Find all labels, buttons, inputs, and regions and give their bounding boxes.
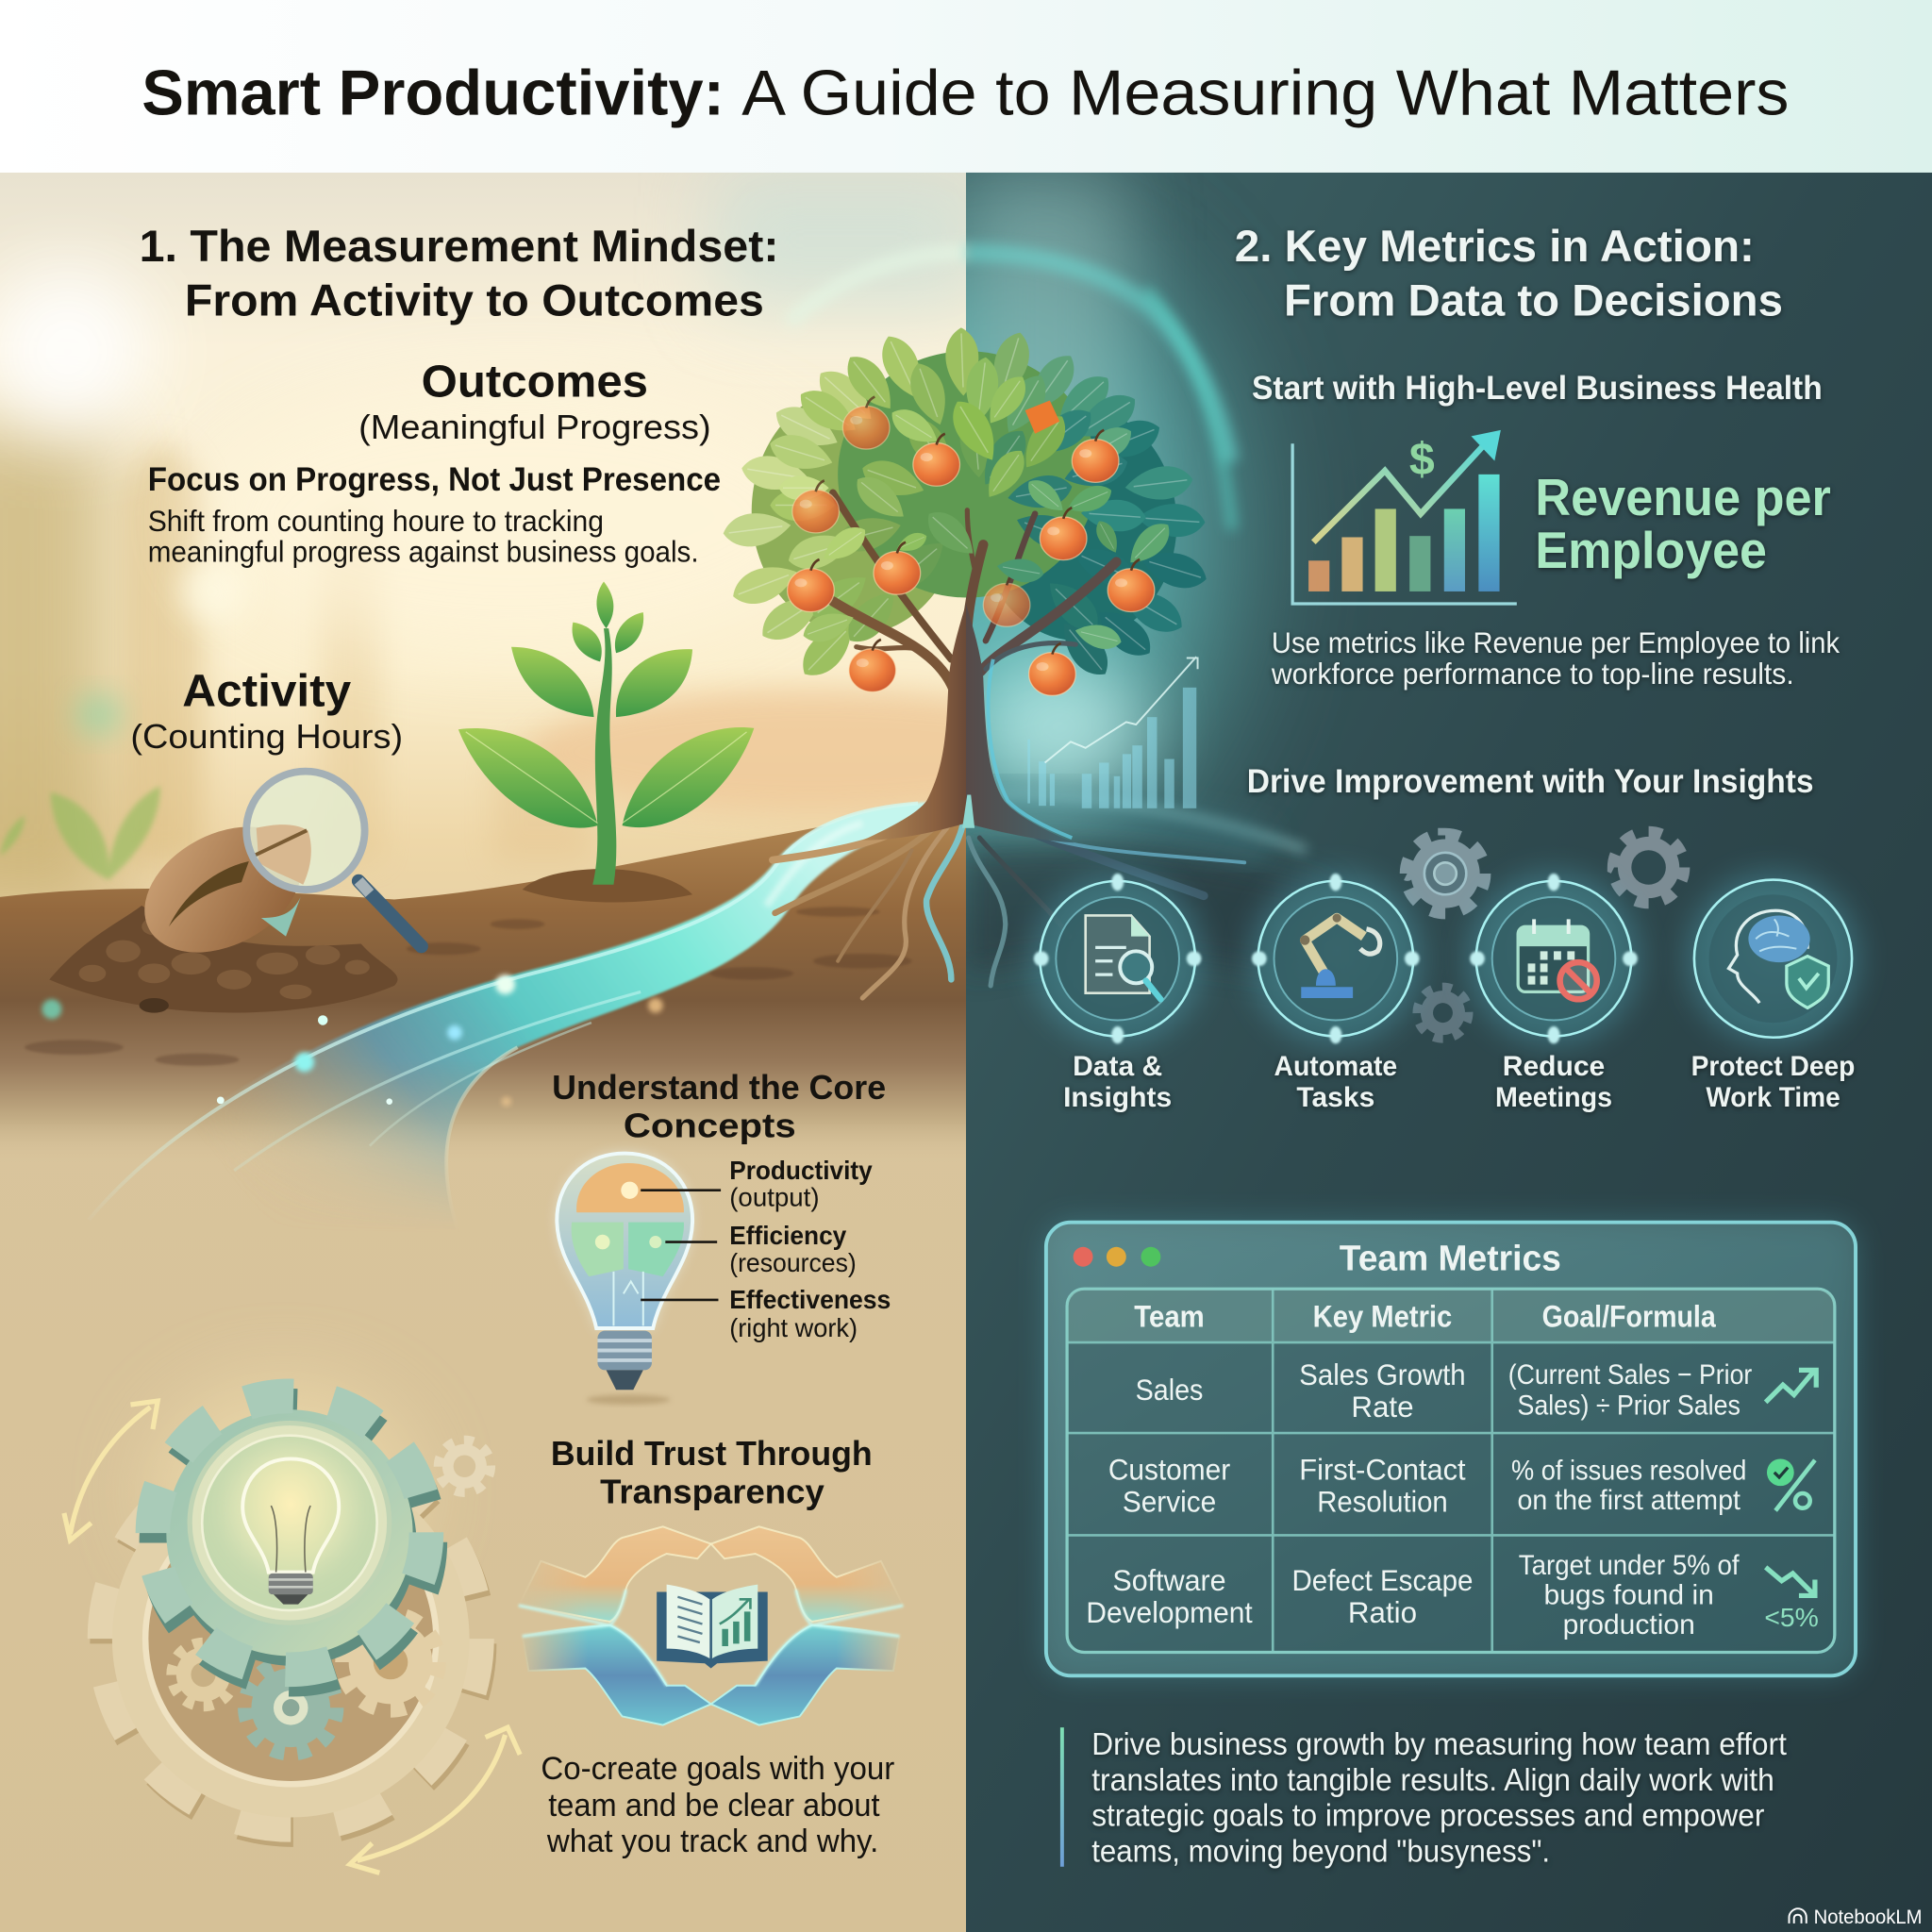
label: outcomes: (Meaningful Progress): [358, 408, 711, 446]
heading: section 1: From Activity to Outcomes: [185, 275, 764, 325]
icon: hands around book: [519, 1526, 903, 1725]
window title: Team Metrics: [1340, 1240, 1561, 1279]
icon circle: protect deep work: [1687, 873, 1859, 1045]
metric name: revenue per employee: Revenue per: [1535, 468, 1831, 526]
concept labels: [729, 1156, 891, 1342]
icon: trend down under five percent: [1764, 1567, 1819, 1632]
icon captions: Automate: [1274, 1051, 1397, 1082]
icon captions: Tasks: [1296, 1082, 1374, 1113]
text block: revenue metric description: [1271, 626, 1840, 691]
pale gear upper right: [440, 1441, 490, 1491]
panel: core concepts: Understand the Core: [552, 1068, 886, 1107]
crown backing: [752, 351, 1176, 641]
text block: co-create goals: what you track and why.: [546, 1824, 878, 1859]
text block: focus on progress: meaningful progress against business goals.: [148, 536, 699, 569]
concept labels: Efficiency: [729, 1221, 847, 1250]
table row: software development: [1086, 1550, 1740, 1641]
icon: tree with fruit: [722, 327, 1244, 998]
label: outcomes: [358, 357, 711, 446]
outer leaves: [722, 327, 1211, 686]
table row: sales: (Current Sales − Prior: [1508, 1359, 1752, 1391]
soil mound: [49, 906, 397, 1013]
icon circle: reduce meetings: [1468, 873, 1640, 1045]
text block: conclusion: [1091, 1727, 1787, 1870]
table row: sales: Sales) ÷ Prior Sales: [1517, 1390, 1740, 1421]
small gears: [173, 1615, 438, 1752]
apple behind branches: [983, 575, 1030, 626]
table row: software development: production: [1563, 1609, 1695, 1641]
panel: right background: [966, 172, 1932, 1932]
table row: sales: Rate: [1351, 1391, 1414, 1424]
text block: conclusion: strategic goals to improve processes and empower: [1091, 1799, 1764, 1834]
panel: build trust: [519, 1434, 903, 1859]
icon captions: Data &: [1073, 1051, 1162, 1082]
panel: build trust: Build Trust Through: [551, 1434, 873, 1473]
title: A Guide to Measuring What Matters: [741, 58, 1789, 128]
table row: customer service: First-Contact: [1299, 1454, 1466, 1487]
icon: seed under magnifying glass: [49, 772, 422, 1013]
icon captions: Insights: [1063, 1082, 1172, 1113]
concept labels: Effectiveness: [729, 1285, 891, 1314]
seed body: [123, 801, 323, 978]
panel: build trust: Transparency: [600, 1472, 824, 1510]
table row: software development: Ratio: [1348, 1596, 1417, 1629]
sparkles on river: [42, 974, 663, 1107]
icon: gears with light bulb: [64, 1380, 520, 1873]
heading: section 2: [1235, 221, 1783, 325]
table row: software development: Target under 5% of: [1519, 1550, 1740, 1581]
back tan gear: [106, 1454, 478, 1828]
cycle arrows: [64, 1401, 520, 1873]
icon captions: Work Time: [1706, 1082, 1840, 1113]
title: Smart Productivity:: [142, 58, 724, 128]
icon: segmented light bulb: [557, 1154, 692, 1405]
tree roots: [773, 808, 1244, 998]
table header row: Team: [1134, 1299, 1205, 1334]
header band: [0, 0, 1932, 174]
icon: trend down under five percent: <5%: [1764, 1603, 1819, 1632]
panel: core concepts: Concepts: [624, 1107, 796, 1145]
icon captions: Reduce: [1503, 1051, 1605, 1082]
metric name: revenue per employee: Employee: [1535, 521, 1767, 579]
bulb inside gear: [229, 1448, 353, 1605]
icon: faint background sprouts: [0, 786, 160, 880]
label: outcomes: Outcomes: [422, 357, 648, 408]
heading: section 2: 2. Key Metrics in Action:: [1235, 221, 1755, 271]
label: activity: Activity: [182, 665, 351, 716]
table row: customer service: Resolution: [1317, 1486, 1448, 1519]
table row: customer service: Service: [1123, 1486, 1216, 1519]
table header row: Key Metric: [1313, 1299, 1452, 1334]
table row: sales: Sales Growth: [1299, 1358, 1466, 1391]
table grid: [1067, 1289, 1835, 1653]
heading: section 2: From Data to Decisions: [1284, 275, 1783, 325]
heading: section 1: [140, 221, 778, 325]
text block: revenue metric description: Use metrics like Revenue per Employee to link: [1272, 626, 1840, 659]
icon: trend up: [1766, 1370, 1816, 1402]
text block: focus on progress: Shift from counting houre to tracking: [148, 505, 604, 538]
icon captions: Protect Deep: [1691, 1051, 1855, 1082]
panel: team metrics window: [1046, 1223, 1856, 1675]
panel: core concepts: [552, 1068, 891, 1405]
main teal gear: [153, 1396, 430, 1679]
foreground leaves: [778, 369, 1177, 653]
text block: focus on progress: Focus on Progress, Not Just Presence: [148, 461, 721, 498]
text block: conclusion: teams, moving beyond "busyness".: [1091, 1835, 1550, 1870]
table header row: Goal/Formula: [1542, 1299, 1717, 1334]
accent bar: [1060, 1727, 1064, 1867]
table header row: [1134, 1299, 1717, 1334]
heading: section 1: 1. The Measurement Mindset:: [140, 221, 778, 271]
icon captions: Meetings: [1495, 1082, 1612, 1113]
text block: co-create goals: team and be clear about: [548, 1788, 880, 1824]
icon: sapling: [458, 581, 754, 902]
chart: revenue bars with rising arrow: [1292, 430, 1517, 604]
text block: revenue metric description: workforce performance to top-line results.: [1271, 658, 1794, 691]
table row: software development: Development: [1086, 1596, 1253, 1629]
river of light: [98, 800, 926, 1209]
chart: revenue bars with rising arrow: $: [1409, 434, 1435, 485]
table row: customer service: on the first attempt: [1517, 1485, 1741, 1516]
title: [142, 58, 1789, 128]
brand mark: NotebookLM: NotebookLM: [1814, 1905, 1923, 1928]
label: activity: (Counting Hours): [130, 717, 403, 756]
label: activity: [130, 665, 403, 756]
lead lines: [641, 1191, 721, 1300]
subheading: drive improvement: Drive Improvement with Your Insights: [1247, 763, 1814, 800]
middle leaves: [765, 347, 1147, 651]
magnifying glass: [246, 772, 422, 946]
text block: co-create goals: Co-create goals with your: [541, 1751, 894, 1787]
window control dots: [1074, 1247, 1160, 1267]
apples: [788, 397, 1155, 695]
table row: sales: [1136, 1358, 1752, 1424]
small background chart behind tree: [1027, 657, 1198, 808]
concept labels: Productivity: [729, 1156, 873, 1185]
table row: customer service: [1108, 1454, 1746, 1519]
concept labels: (resources): [729, 1248, 857, 1277]
panel: left background: [0, 173, 966, 1932]
table row: sales: Sales: [1136, 1374, 1203, 1407]
icon circle: data and insights: [1031, 873, 1204, 1045]
table row: customer service: % of issues resolved: [1511, 1456, 1746, 1487]
table row: software development: Defect Escape: [1291, 1564, 1473, 1597]
icons: gears: [1407, 833, 1683, 1038]
icon circle: automate tasks: [1249, 873, 1422, 1045]
text block: conclusion: translates into tangible results. Align daily work with: [1091, 1763, 1774, 1798]
concept labels: (output): [729, 1183, 820, 1212]
trunk and branches: [833, 492, 1116, 842]
table row: customer service: Customer: [1108, 1454, 1230, 1487]
icon captions: [1063, 1051, 1855, 1113]
glow arc around tree: [789, 253, 1232, 530]
subheading: business health: Start with High-Level Business Health: [1252, 370, 1823, 407]
icon: percent check: [1767, 1458, 1815, 1510]
table row: software development: Software: [1112, 1564, 1226, 1597]
text block: conclusion: Drive business growth by measuring how team effort: [1091, 1727, 1787, 1762]
text block: focus on progress: [148, 461, 721, 569]
table row: software development: bugs found in: [1544, 1580, 1714, 1611]
text block: co-create goals: [541, 1751, 894, 1859]
metric name: revenue per employee: [1535, 468, 1831, 579]
concept labels: (right work): [729, 1313, 858, 1342]
